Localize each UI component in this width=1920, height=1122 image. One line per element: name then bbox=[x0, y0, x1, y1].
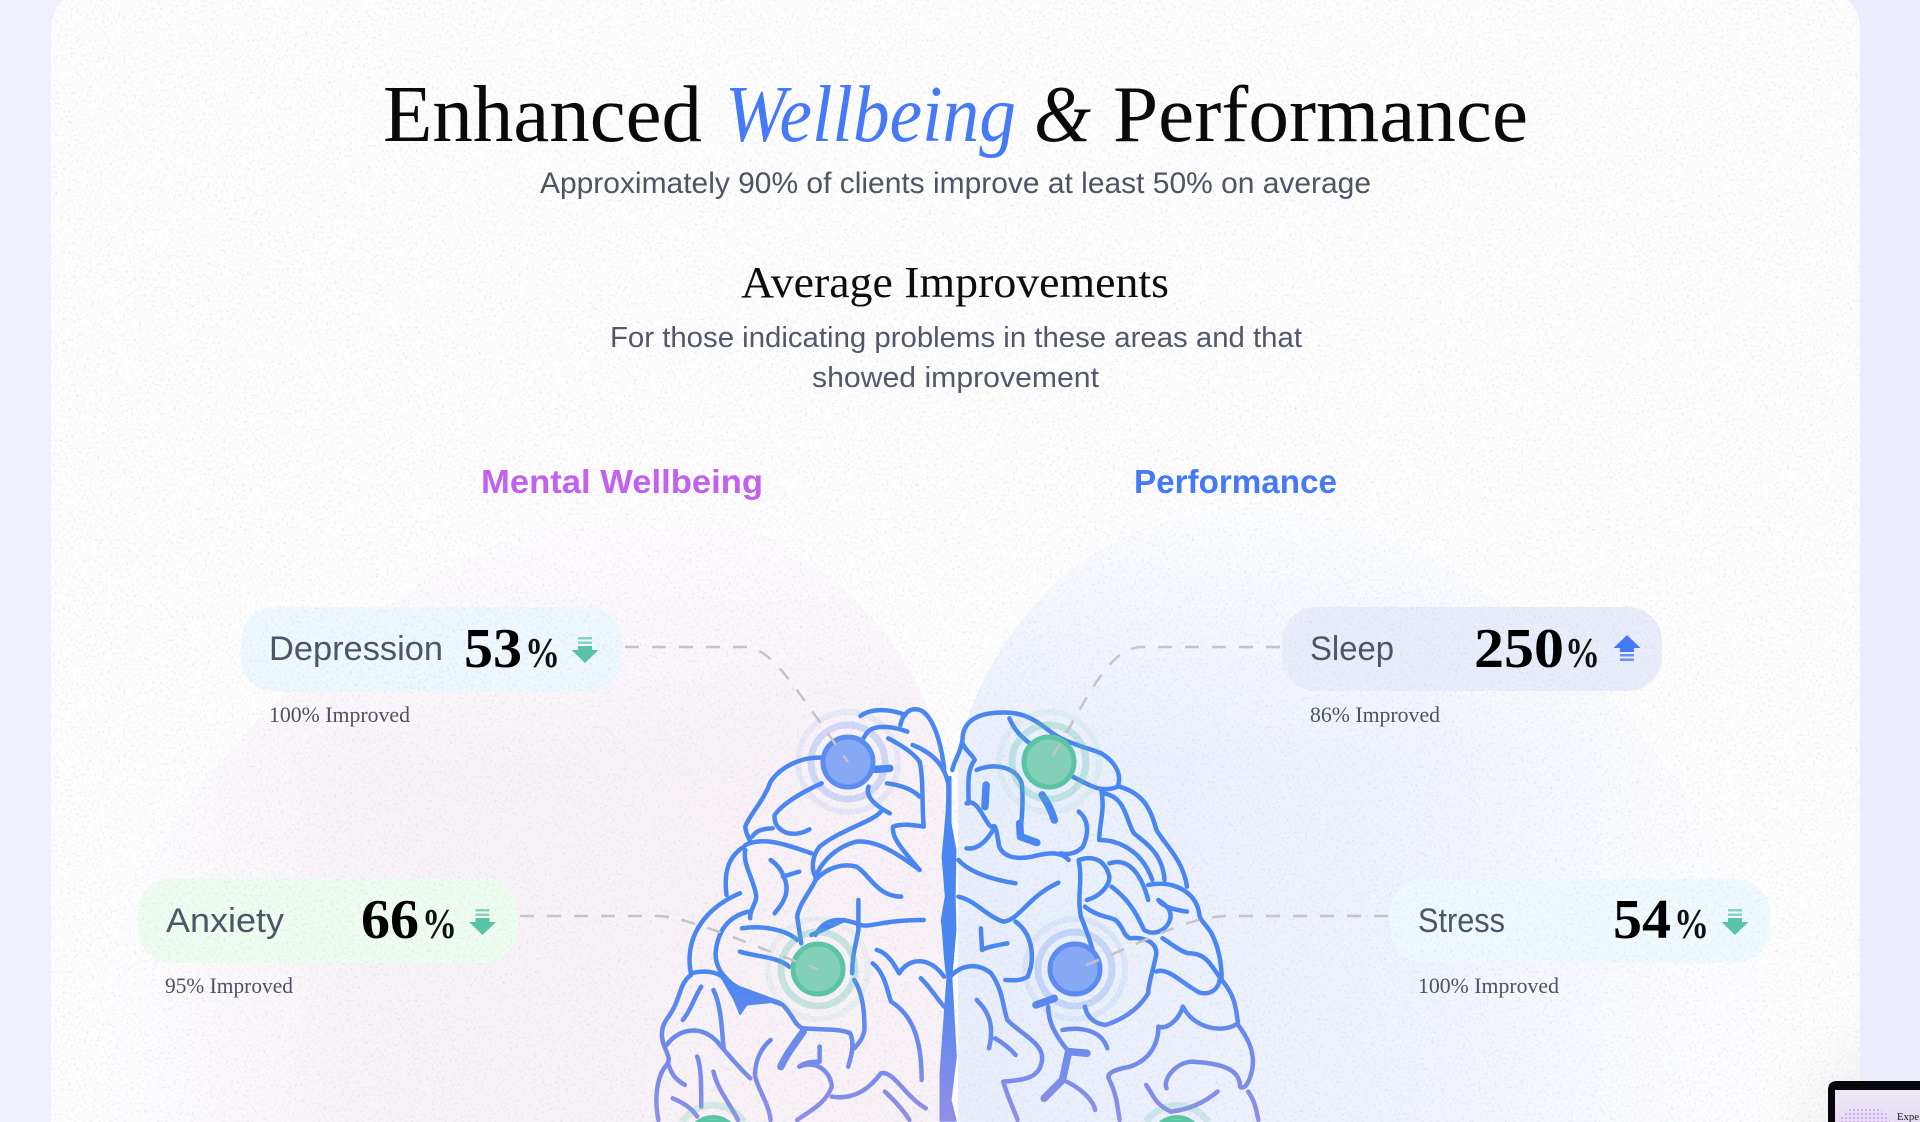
connector: depression bbox=[625, 647, 848, 762]
description text: showed improvement bbox=[812, 362, 1099, 394]
marker: lower left, cropped bbox=[682, 1105, 744, 1122]
stat: stress: 54 bbox=[1613, 889, 1671, 951]
brain: left hemisphere bbox=[656, 709, 948, 1120]
stat: sleep: % bbox=[1565, 631, 1600, 677]
stat: stress bbox=[1418, 889, 1748, 998]
thumbnail: laptop preview bbox=[1828, 1081, 1920, 1122]
pill background: anxiety bbox=[138, 878, 518, 963]
stat: sleep bbox=[1310, 618, 1640, 727]
stat: stress: 100% Improved bbox=[1418, 973, 1559, 998]
description text bbox=[610, 322, 1302, 394]
stat: stress: Stress bbox=[1418, 902, 1505, 940]
connector: sleep bbox=[1049, 647, 1280, 762]
stat: sleep: 86% Improved bbox=[1310, 702, 1440, 727]
description text: For those indicating problems in these areas and that bbox=[610, 322, 1302, 354]
subtitle: Approximately 90% of clients improve at least 50% on average bbox=[540, 167, 1371, 200]
stat: depression: 100% Improved bbox=[269, 702, 410, 727]
stat: depression: Depression bbox=[269, 630, 443, 668]
icon: up arrow bbox=[1614, 635, 1640, 661]
stat: anxiety: Anxiety bbox=[166, 902, 284, 940]
background shape: performance hemisphere bbox=[958, 589, 1528, 1122]
marker: lower right, cropped bbox=[1146, 1105, 1208, 1122]
stat: depression: 53 bbox=[464, 618, 522, 680]
marker: depression bbox=[798, 712, 898, 812]
marker: anxiety bbox=[768, 919, 868, 1019]
title bbox=[383, 71, 1528, 159]
corner shadow bbox=[1740, 1000, 1920, 1122]
marker: stress bbox=[1025, 919, 1125, 1019]
stat: anxiety bbox=[165, 889, 496, 998]
stat: depression bbox=[269, 618, 598, 727]
title: Performance bbox=[1113, 71, 1528, 159]
stat: anxiety: % bbox=[422, 902, 457, 948]
stat: anxiety: 66 bbox=[361, 889, 419, 951]
brain illustration bbox=[656, 709, 1258, 1121]
heading: average improvements: Average Improvements bbox=[741, 258, 1169, 307]
stat: sleep: Sleep bbox=[1310, 630, 1394, 668]
connector: stress bbox=[1075, 916, 1388, 969]
stat: anxiety: 95% Improved bbox=[165, 973, 293, 998]
brain: central fissure bbox=[940, 777, 956, 1121]
background shape: mental wellbeing hemisphere bbox=[310, 679, 945, 1122]
stat: sleep: 250 bbox=[1474, 618, 1564, 680]
title: & bbox=[1034, 71, 1091, 159]
icon: down arrow bbox=[572, 637, 598, 663]
title: Wellbeing bbox=[725, 71, 1016, 159]
pill background: depression bbox=[241, 607, 622, 692]
stat: stress: % bbox=[1674, 902, 1709, 948]
pill background: stress bbox=[1578, 879, 1770, 963]
connector: anxiety bbox=[520, 916, 818, 969]
icon: down arrow bbox=[469, 909, 496, 935]
heading: performance: Performance bbox=[1134, 463, 1337, 500]
heading: mental wellbeing: Mental Wellbeing bbox=[481, 463, 763, 500]
title: Enhanced bbox=[383, 71, 702, 159]
icon: down arrow bbox=[1722, 909, 1748, 935]
pill background: sleep bbox=[1282, 607, 1662, 691]
brain: right hemisphere bbox=[950, 713, 1258, 1120]
marker: sleep bbox=[999, 712, 1099, 812]
stat: depression: % bbox=[525, 631, 560, 677]
